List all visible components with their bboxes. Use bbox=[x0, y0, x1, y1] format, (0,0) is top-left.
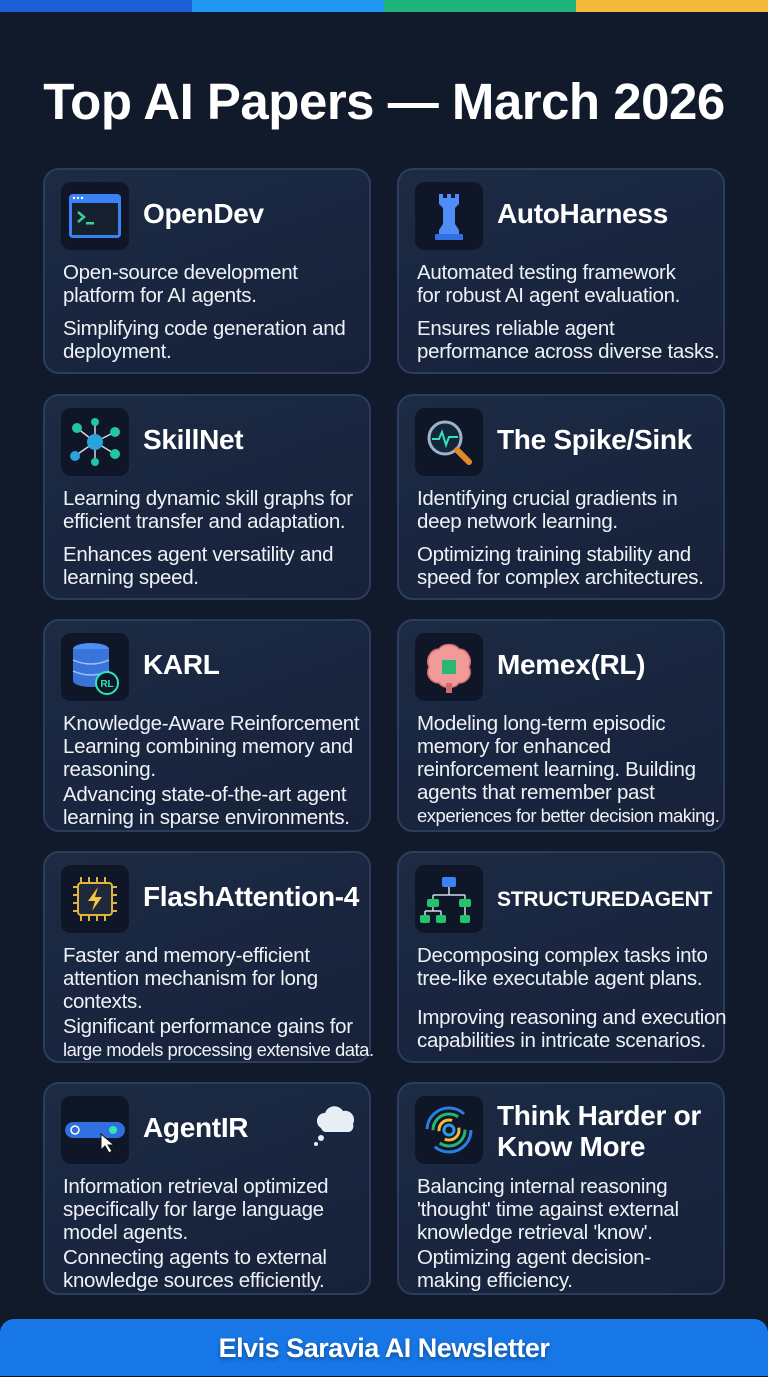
text block: Faster and memory-efficient bbox=[63, 944, 310, 967]
text block: capabilities in intricate scenarios. bbox=[417, 1029, 706, 1052]
footer banner bbox=[0, 1319, 768, 1376]
text block: agents that remember past bbox=[417, 781, 654, 804]
heading: Know More bbox=[497, 1131, 645, 1162]
text block bbox=[63, 712, 360, 829]
text block: performance across diverse tasks. bbox=[417, 340, 719, 363]
heading: Think Harder or bbox=[497, 1100, 701, 1131]
heading bbox=[497, 1100, 701, 1162]
text block: Learning dynamic skill graphs for bbox=[63, 487, 353, 510]
text block: Optimizing agent decision- bbox=[417, 1246, 651, 1269]
text block: large models processing extensive data. bbox=[63, 1039, 374, 1060]
text block: making efficiency. bbox=[417, 1269, 573, 1292]
text block: contexts. bbox=[63, 990, 142, 1013]
text block bbox=[63, 1175, 328, 1292]
panel: AutoHarness bbox=[397, 168, 725, 374]
text block: deep network learning. bbox=[417, 510, 618, 533]
icon: magnifier pulse bbox=[415, 408, 483, 476]
text block: attention mechanism for long bbox=[63, 967, 318, 990]
icon: terminal bbox=[61, 182, 129, 250]
text block: experiences for better decision making. bbox=[417, 805, 719, 826]
text block: specifically for large language bbox=[63, 1198, 324, 1221]
text block: model agents. bbox=[63, 1221, 188, 1244]
panel: SkillNet bbox=[43, 394, 371, 600]
text block: 'thought' time against external bbox=[417, 1198, 679, 1221]
heading: FlashAttention-4 bbox=[143, 881, 359, 912]
heading: AgentIR bbox=[143, 1112, 248, 1143]
text block: Learning combining memory and bbox=[63, 735, 353, 758]
text block: Decomposing complex tasks into bbox=[417, 944, 708, 967]
panel: StructuredAgent bbox=[397, 851, 725, 1063]
icon: swirl bbox=[415, 1096, 483, 1164]
text block bbox=[417, 944, 726, 1052]
text block: Balancing internal reasoning bbox=[417, 1175, 667, 1198]
text block: platform for AI agents. bbox=[63, 284, 257, 307]
heading: KARL bbox=[143, 649, 220, 680]
text block: speed for complex architectures. bbox=[417, 566, 704, 589]
text block: Connecting agents to external bbox=[63, 1246, 327, 1269]
icon: network bbox=[61, 408, 129, 476]
panel: The Spike/Sink bbox=[397, 394, 725, 600]
icon: cloud bbox=[314, 1106, 354, 1146]
panel: OpenDev bbox=[43, 168, 371, 374]
text block: efficient transfer and adaptation. bbox=[63, 510, 345, 533]
text block: learning speed. bbox=[63, 566, 199, 589]
text block bbox=[417, 712, 719, 826]
text block: Simplifying code generation and bbox=[63, 317, 345, 340]
heading: OpenDev bbox=[143, 198, 264, 229]
icon: tree bbox=[415, 865, 483, 933]
text block: knowledge retrieval 'know'. bbox=[417, 1221, 653, 1244]
text block: knowledge sources efficiently. bbox=[63, 1269, 324, 1292]
heading: AutoHarness bbox=[497, 198, 668, 229]
text block: Ensures reliable agent bbox=[417, 317, 614, 340]
text block: memory for enhanced bbox=[417, 735, 611, 758]
heading: The Spike/Sink bbox=[497, 424, 692, 455]
text block: reasoning. bbox=[63, 758, 156, 781]
text block: Identifying crucial gradients in bbox=[417, 487, 677, 510]
title: Top AI Papers — March 2026 bbox=[43, 73, 725, 130]
text block: tree-like executable agent plans. bbox=[417, 967, 702, 990]
text block: Advancing state-of-the-art agent bbox=[63, 783, 346, 806]
text block bbox=[417, 1175, 679, 1292]
text block bbox=[417, 487, 704, 589]
text block: Modeling long-term episodic bbox=[417, 712, 665, 735]
text block: learning in sparse environments. bbox=[63, 806, 350, 829]
text block: Enhances agent versatility and bbox=[63, 543, 333, 566]
icon: chip lightning bbox=[61, 865, 129, 933]
text block bbox=[63, 487, 353, 589]
heading: SkillNet bbox=[143, 424, 243, 455]
text block bbox=[63, 261, 345, 363]
text block: Information retrieval optimized bbox=[63, 1175, 328, 1198]
text block bbox=[417, 261, 719, 363]
panel: KARL bbox=[43, 619, 371, 832]
icon: database RL bbox=[61, 633, 129, 701]
text block: Automated testing framework bbox=[417, 261, 676, 284]
heading: STRUCTUREDAGENT bbox=[497, 888, 712, 911]
text block: for robust AI agent evaluation. bbox=[417, 284, 680, 307]
icon: database RL: RL bbox=[100, 679, 114, 690]
panel: AgentIR bbox=[43, 1082, 371, 1295]
panel: Think Harder or Know More bbox=[397, 1082, 725, 1295]
text block: reinforcement learning. Building bbox=[417, 758, 696, 781]
panel: Memex(RL) bbox=[397, 619, 725, 832]
icon: brain chip bbox=[415, 633, 483, 701]
panel: FlashAttention-4 bbox=[43, 851, 371, 1063]
icon: search bar cursor bbox=[61, 1096, 129, 1164]
text block: Improving reasoning and execution bbox=[417, 1006, 726, 1029]
text block: Open-source development bbox=[63, 261, 298, 284]
text block: Significant performance gains for bbox=[63, 1015, 353, 1038]
text block: Knowledge-Aware Reinforcement bbox=[63, 712, 359, 735]
text block bbox=[63, 944, 374, 1060]
icon: chess rook bbox=[415, 182, 483, 250]
text block: Optimizing training stability and bbox=[417, 543, 691, 566]
text block: deployment. bbox=[63, 340, 171, 363]
heading: Memex(RL) bbox=[497, 649, 645, 680]
footer banner: Elvis Saravia AI Newsletter bbox=[219, 1333, 549, 1363]
